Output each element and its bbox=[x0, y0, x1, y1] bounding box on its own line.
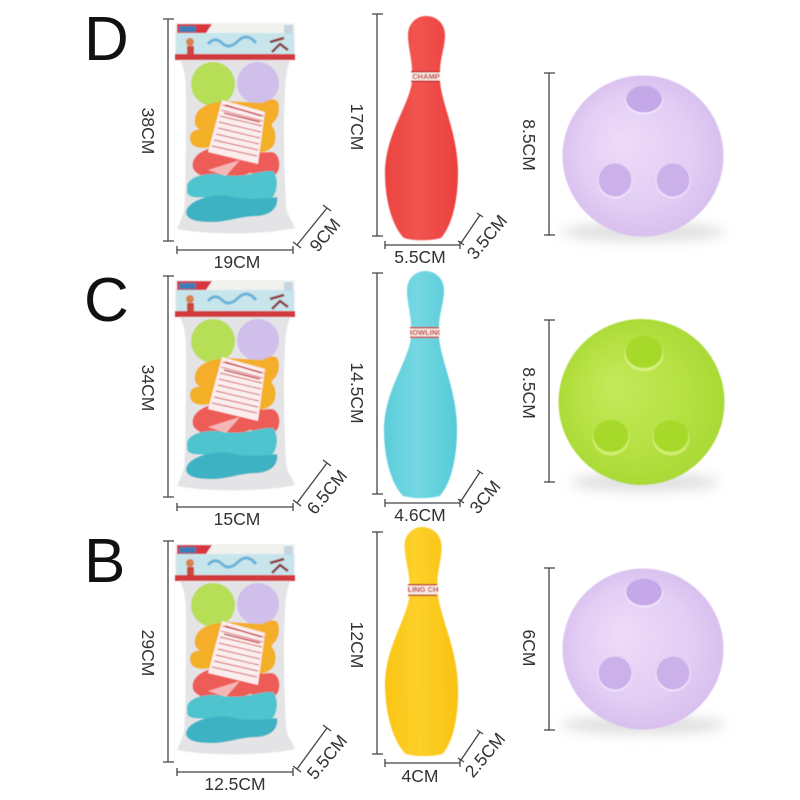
width dimension 12.5CM bbox=[177, 768, 293, 794]
height dimension 6CM: 6CM bbox=[519, 630, 539, 666]
height dimension 34CM bbox=[138, 276, 174, 497]
blue bowling pin: BOWLING bbox=[407, 328, 443, 337]
panel: size C bbox=[84, 266, 724, 529]
green bowling ball bbox=[558, 319, 724, 491]
width dimension 4.6CM: 4.6CM bbox=[394, 505, 446, 525]
height dimension 17CM bbox=[347, 14, 383, 236]
packaged bowling set B bbox=[175, 544, 295, 754]
packaged bowling set D bbox=[175, 23, 295, 233]
blue bowling pin bbox=[384, 271, 457, 498]
width dimension 4CM: 4CM bbox=[402, 766, 438, 786]
depth dimension 3CM: 3CM bbox=[465, 476, 505, 518]
width dimension 12.5CM: 12.5CM bbox=[204, 774, 266, 794]
width dimension 15CM: 15CM bbox=[214, 509, 260, 529]
height dimension 12CM: 12CM bbox=[347, 622, 367, 668]
width dimension 5.5CM: 5.5CM bbox=[394, 247, 446, 267]
width dimension 4.6CM bbox=[385, 499, 460, 525]
width dimension 19CM: 19CM bbox=[214, 252, 260, 272]
red bowling pin: CHAMP bbox=[412, 72, 440, 81]
depth dimension 5.5CM: 5.5CM bbox=[303, 731, 351, 783]
width dimension 4CM bbox=[385, 759, 460, 786]
depth dimension 9CM: 9CM bbox=[305, 214, 345, 256]
height dimension 38CM: 38CM bbox=[138, 108, 158, 154]
height dimension 14.5CM: 14.5CM bbox=[347, 362, 367, 424]
red bowling pin bbox=[385, 16, 458, 240]
height dimension 29CM bbox=[138, 541, 174, 762]
letter C: C bbox=[84, 266, 129, 335]
height dimension 14.5CM bbox=[347, 273, 383, 494]
height dimension 8.5CM bbox=[519, 320, 555, 482]
panel: size D bbox=[84, 5, 725, 272]
height dimension 8.5CM: 8.5CM bbox=[519, 367, 539, 419]
purple bowling ball bbox=[561, 76, 725, 241]
height dimension 8.5CM bbox=[519, 73, 555, 235]
letter D: D bbox=[84, 5, 129, 74]
height dimension 38CM bbox=[138, 19, 174, 241]
yellow bowling pin: LING CH bbox=[408, 585, 438, 594]
height dimension 29CM: 29CM bbox=[138, 630, 158, 676]
height dimension 6CM bbox=[519, 568, 555, 730]
height dimension 34CM: 34CM bbox=[138, 365, 158, 411]
height dimension 8.5CM: 8.5CM bbox=[519, 119, 539, 171]
depth dimension 9CM bbox=[293, 205, 345, 256]
panel: size B bbox=[84, 527, 725, 794]
width dimension 15CM bbox=[177, 503, 293, 529]
depth dimension 2.5CM: 2.5CM bbox=[461, 729, 509, 781]
width dimension 19CM bbox=[177, 246, 293, 272]
purple bowling ball bbox=[561, 568, 725, 734]
height dimension 12CM bbox=[347, 532, 383, 754]
packaged bowling set C bbox=[175, 280, 295, 490]
height dimension 17CM: 17CM bbox=[347, 104, 367, 150]
depth dimension 6.5CM: 6.5CM bbox=[303, 466, 351, 518]
letter B: B bbox=[84, 527, 125, 596]
width dimension 5.5CM bbox=[385, 241, 460, 267]
yellow bowling pin bbox=[381, 527, 460, 756]
depth dimension 3.5CM: 3.5CM bbox=[463, 211, 511, 263]
